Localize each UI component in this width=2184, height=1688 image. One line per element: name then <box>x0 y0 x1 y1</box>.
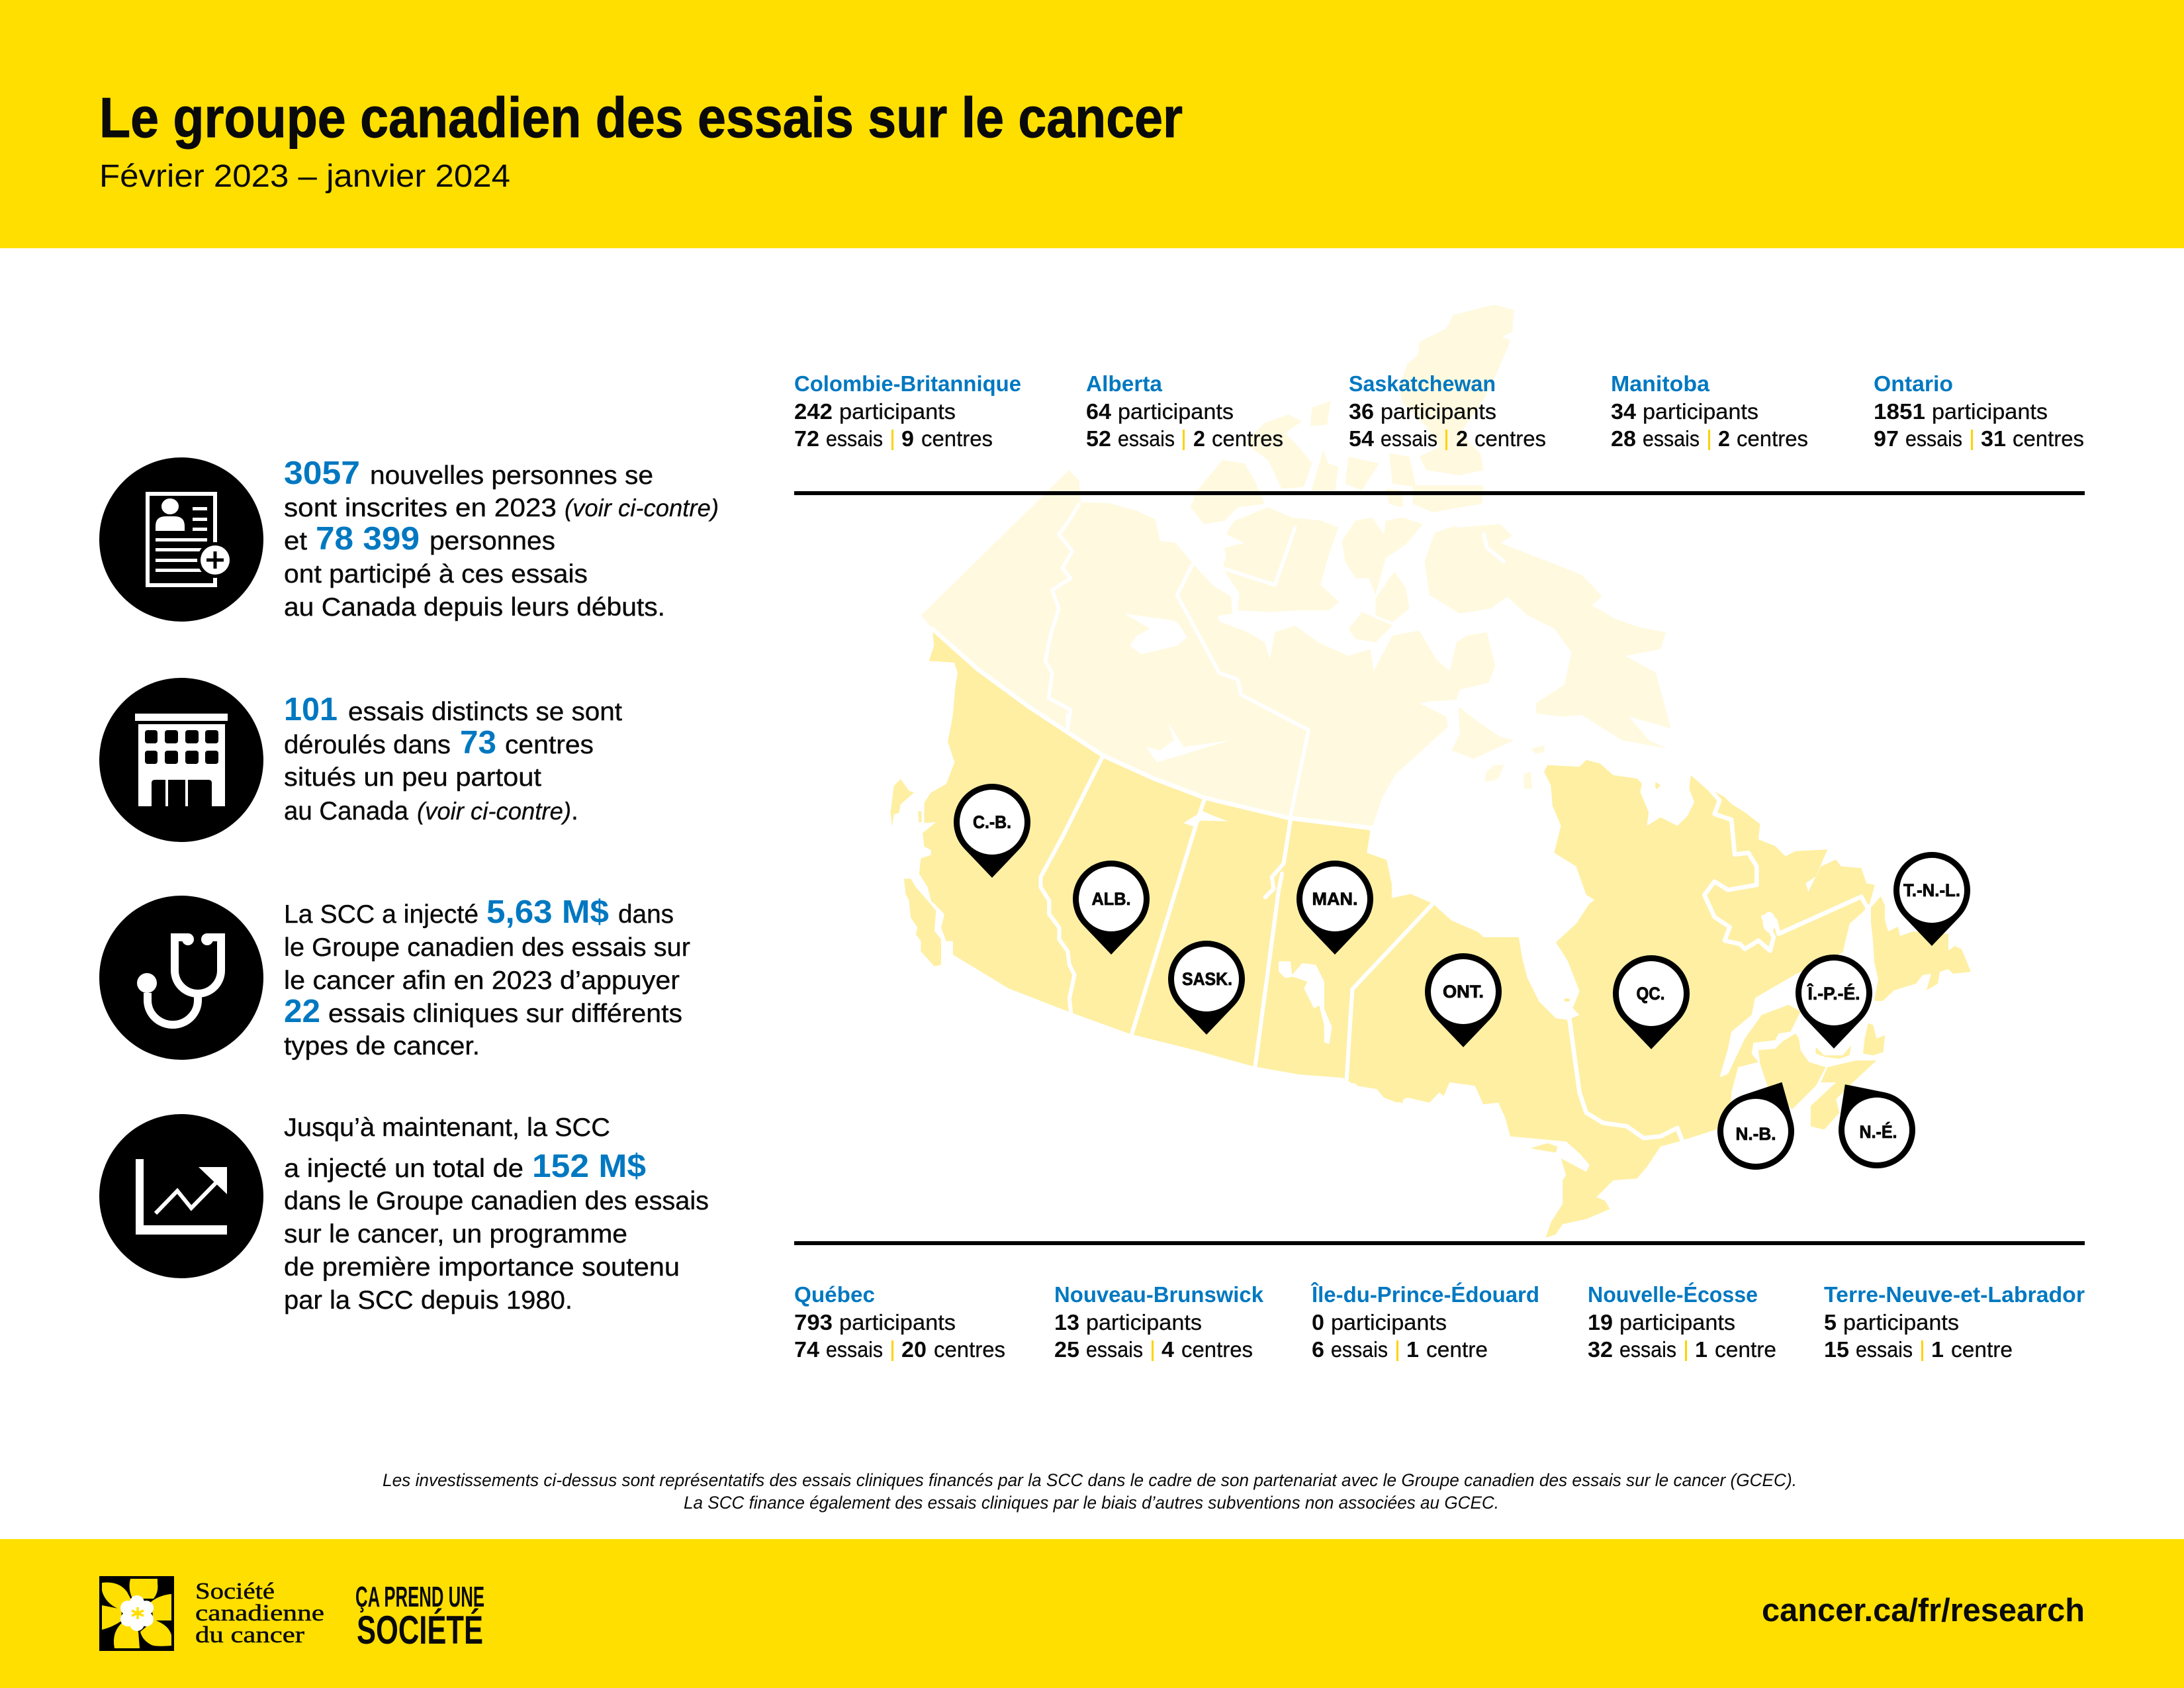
icon: building <box>99 678 263 842</box>
text block: 5.63 million <box>284 894 690 1060</box>
footer band <box>0 1539 2184 1688</box>
western provinces <box>891 624 1403 1103</box>
Nova Scotia <box>1811 1060 1876 1129</box>
region stats: Nouveau-Brunswick: essais <box>1086 1337 1143 1362</box>
region stats: Colombie-Britannique: 9 <box>901 426 914 451</box>
region stats: Ontario: essais <box>1905 426 1962 451</box>
region stats: Nouvelle-Écosse: centre <box>1715 1337 1776 1362</box>
region stats: Île-du-Prince-Édouard: 1 <box>1406 1337 1419 1362</box>
text block: 152 million: de première importance soutenu <box>284 1253 680 1282</box>
region stats: Ontario: Ontario <box>1874 371 1953 396</box>
region stats: Terre-Neuve-et-Labrador: essais <box>1856 1337 1913 1362</box>
text block: 152 million <box>284 1113 709 1315</box>
region stats: Ontario: participants <box>1932 399 2048 424</box>
pin: T.-N.-L. <box>1893 852 1970 946</box>
region stats: Nouvelle-Écosse: 19 <box>1588 1310 1613 1335</box>
text block: participants: 78 399 <box>316 521 420 557</box>
text block: participants: (voir ci-contre) <box>565 494 719 522</box>
pin: N.-B.: N.-B. <box>1735 1124 1776 1144</box>
region stats: Île-du-Prince-Édouard: 0 <box>1312 1310 1324 1335</box>
pin: ONT.: ONT. <box>1443 982 1484 1002</box>
text block: 152 million: Jusqu’à maintenant, la SCC <box>284 1113 610 1142</box>
region stats: Québec: 793 <box>794 1310 833 1335</box>
pin: Î.-P.-É.: Î.-P.-É. <box>1807 983 1860 1004</box>
logo text: du cancer <box>195 1622 304 1648</box>
text block: trials and centres: au Canada <box>284 797 408 825</box>
region stats: Alberta: Alberta <box>1086 371 1163 396</box>
region stats: Saskatchewan: participants <box>1381 399 1496 424</box>
region stats: Alberta: centres <box>1212 426 1283 451</box>
text block: 5.63 million: essais cliniques sur différents <box>328 1000 682 1028</box>
pin: ALB. <box>1073 861 1150 955</box>
header band <box>0 0 2184 248</box>
region stats: Manitoba: centres <box>1737 426 1808 451</box>
region stats: Nouveau-Brunswick: 4 <box>1161 1337 1175 1362</box>
region stats: Saskatchewan: essais <box>1381 426 1437 451</box>
region stats: Île-du-Prince-Édouard: centre <box>1426 1337 1488 1362</box>
region stats: Nouveau-Brunswick <box>1054 1282 1264 1362</box>
logo: daffodil <box>99 1576 174 1651</box>
northern territories, pale <box>921 401 1495 828</box>
region stats: Colombie-Britannique: participants <box>839 399 956 424</box>
Cape Breton <box>1863 1023 1885 1055</box>
region stats: Saskatchewan <box>1349 371 1546 451</box>
text block: 152 million: dans le Groupe canadien des essais <box>284 1187 709 1215</box>
text block: 5.63 million: 22 <box>284 994 320 1029</box>
Newfoundland <box>1871 896 1971 1001</box>
pin: QC.: QC. <box>1636 984 1665 1004</box>
pin: N.-B. <box>1704 1064 1816 1183</box>
Prince Edward Island <box>1816 1045 1851 1058</box>
tagline: SOCIÉTÉ <box>357 1608 483 1652</box>
region stats: Terre-Neuve-et-Labrador: centre <box>1951 1337 2013 1362</box>
text block: 152 million: par la SCC depuis 1980. <box>284 1286 572 1315</box>
region stats: Nouveau-Brunswick: 13 <box>1054 1310 1079 1335</box>
region stats: Saskatchewan: 36 <box>1349 399 1374 424</box>
pin: MAN.: MAN. <box>1312 889 1358 909</box>
title: Le groupe canadien des essais sur le cancer <box>99 87 1183 150</box>
region stats: Terre-Neuve-et-Labrador: 5 <box>1824 1310 1837 1335</box>
eastern provinces <box>1289 760 1885 1238</box>
New Brunswick <box>1758 1033 1826 1109</box>
text block: participants: nouvelles personnes se <box>370 461 653 490</box>
region stats: Québec: 74 <box>794 1337 820 1362</box>
text block: 5.63 million: types de cancer. <box>284 1032 480 1060</box>
region stats: Nouvelle-Écosse <box>1588 1282 1776 1362</box>
text block: 5.63 million: le Groupe canadien des essais sur <box>284 933 690 962</box>
region stats: Nouveau-Brunswick: centres <box>1181 1337 1253 1362</box>
small islands <box>1564 998 1570 1002</box>
pin: SASK.: SASK. <box>1182 969 1232 989</box>
region stats: Terre-Neuve-et-Labrador: participants <box>1843 1310 1959 1335</box>
region stats: Québec: centres <box>934 1337 1005 1362</box>
region stats: Terre-Neuve-et-Labrador: Terre-Neuve-et-Labrador <box>1824 1282 2085 1307</box>
region stats: Alberta <box>1086 371 1283 451</box>
region stats: Ontario <box>1874 371 2084 451</box>
text block: 5.63 million: 5,63 M$ <box>486 894 609 930</box>
region stats: Nouvelle-Écosse: participants <box>1619 1310 1735 1335</box>
region stats: Ontario: 31 <box>1981 426 2006 451</box>
text block: trials and centres: . <box>571 797 578 825</box>
region stats: Manitoba <box>1611 371 1808 451</box>
pin: N.-É. <box>1813 1062 1931 1184</box>
text block: 152 million: sur le cancer, un programme <box>284 1220 627 1248</box>
Haida Gwaii <box>891 779 914 826</box>
region stats: Alberta: essais <box>1118 426 1175 451</box>
region stats: Saskatchewan: centres <box>1475 426 1546 451</box>
icon: stethoscope <box>99 896 263 1060</box>
region stats: Québec <box>794 1282 1005 1362</box>
region stats: Alberta: 64 <box>1086 399 1112 424</box>
website: cancer.ca/fr/research <box>1762 1593 2085 1628</box>
text block: participants <box>284 455 719 622</box>
region stats: Nouvelle-Écosse: 32 <box>1588 1337 1613 1362</box>
region stats: Terre-Neuve-et-Labrador <box>1824 1282 2085 1362</box>
region stats: Saskatchewan: 54 <box>1349 426 1375 451</box>
lakes and territorial borders <box>1124 614 1187 654</box>
region stats: Manitoba: Manitoba <box>1611 371 1710 396</box>
text block: participants: au Canada depuis leurs débuts. <box>284 593 665 622</box>
region stats: Alberta: participants <box>1118 399 1234 424</box>
region stats: Alberta: 2 <box>1193 426 1205 451</box>
rule below provinces <box>794 1241 2085 1245</box>
text block: trials and centres: centres <box>505 731 594 759</box>
region stats: Manitoba: 2 <box>1718 426 1730 451</box>
region stats: Saskatchewan: Saskatchewan <box>1349 371 1496 396</box>
Vancouver Island <box>904 878 941 966</box>
text block: participants: personnes <box>430 527 555 555</box>
pin: ONT. <box>1425 953 1502 1047</box>
arctic islands, pale <box>1312 305 1671 788</box>
region stats: Nouvelle-Écosse: essais <box>1619 1337 1676 1362</box>
region stats: Île-du-Prince-Édouard: 6 <box>1312 1337 1324 1362</box>
region stats: Nouveau-Brunswick: 25 <box>1054 1337 1079 1362</box>
text block: participants: et <box>284 527 307 555</box>
region stats: Colombie-Britannique <box>794 371 1021 451</box>
region stats: Colombie-Britannique: 72 <box>794 426 819 451</box>
region stats: Québec: essais <box>826 1337 883 1362</box>
text block: trials and centres: 101 <box>284 692 338 727</box>
pin: C.-B.: C.-B. <box>973 812 1011 832</box>
region stats: Île-du-Prince-Édouard: participants <box>1331 1310 1447 1335</box>
region stats: Ontario: centres <box>2013 426 2084 451</box>
text block: 152 million: a injecté un total de <box>284 1154 523 1183</box>
region stats: Québec: participants <box>839 1310 956 1335</box>
text block: trials and centres: essais distincts se sont <box>348 698 622 726</box>
region stats: Manitoba: 28 <box>1611 426 1636 451</box>
region stats: Île-du-Prince-Édouard <box>1310 1282 1539 1362</box>
region stats: Colombie-Britannique: 242 <box>794 399 833 424</box>
region stats: Nouveau-Brunswick: participants <box>1086 1310 1202 1335</box>
icon: patient record <box>99 457 263 622</box>
region stats: Colombie-Britannique: essais <box>826 426 883 451</box>
footnote <box>383 1470 1797 1513</box>
pin: Î.-P.-É. <box>1796 955 1872 1049</box>
region stats: Québec: Québec <box>794 1282 875 1307</box>
text block: 152 million: 152 M$ <box>532 1149 646 1184</box>
text block: participants: sont inscrites en 2023 <box>284 494 557 522</box>
text block: trials and centres: (voir ci-contre) <box>417 798 571 825</box>
Manitoba–Ontario border and 60th parallel end <box>1346 902 1434 1085</box>
region stats: Nouvelle-Écosse: 1 <box>1695 1337 1707 1362</box>
tagline: ÇA PREND UNE <box>355 1581 484 1613</box>
pin: T.-N.-L.: T.-N.-L. <box>1903 880 1960 900</box>
region stats: Terre-Neuve-et-Labrador: 1 <box>1931 1337 1944 1362</box>
lakes and provincial borders <box>1279 961 1332 1044</box>
text block: trials and centres: 73 <box>460 725 496 761</box>
region stats: Ontario: 97 <box>1874 426 1899 451</box>
region stats: Ontario: 1851 <box>1874 399 1925 424</box>
footnote: Les investissements ci-dessus sont représentatifs des essais cliniques financés par la SCC dans le cadre de son partenariat avec le Groupe canadien des essais sur le cancer (GCEC). <box>383 1470 1797 1490</box>
region stats: Île-du-Prince-Édouard: essais <box>1331 1337 1388 1362</box>
text block: 5.63 million: dans <box>618 900 674 929</box>
rule above provinces <box>794 491 2085 495</box>
region stats: Colombie-Britannique: Colombie-Britannique <box>794 371 1021 396</box>
text block: 5.63 million: La SCC a injecté <box>284 900 478 929</box>
subtitle: Février 2023 – janvier 2024 <box>99 159 510 194</box>
pin: MAN. <box>1297 861 1373 955</box>
region stats: Nouveau-Brunswick: Nouveau-Brunswick <box>1054 1282 1264 1307</box>
region stats: Alberta: 52 <box>1086 426 1111 451</box>
region stats: Colombie-Britannique: centres <box>921 426 993 451</box>
pin: QC. <box>1613 955 1690 1049</box>
pin: C.-B. <box>954 784 1030 878</box>
Quebec borders <box>1694 775 1870 951</box>
pin: SASK. <box>1168 941 1245 1035</box>
footnote: La SCC finance également des essais cliniques par le biais d’autres subventions non associées au GCEC. <box>684 1493 1499 1513</box>
pin: N.-É.: N.-É. <box>1860 1121 1897 1142</box>
text block: trials and centres: situés un peu partout <box>284 763 541 792</box>
text block: participants: 3057 <box>284 455 360 491</box>
region stats: Saskatchewan: 2 <box>1456 426 1468 451</box>
region stats: Île-du-Prince-Édouard: Île-du-Prince-Édouard <box>1310 1282 1539 1307</box>
map of Canada <box>891 305 1971 1238</box>
region stats: Terre-Neuve-et-Labrador: 15 <box>1824 1337 1849 1362</box>
region stats: Manitoba: 34 <box>1611 399 1637 424</box>
tagline <box>355 1581 484 1652</box>
text block: trials and centres <box>284 692 622 825</box>
icon: rising chart <box>99 1114 263 1278</box>
text block: participants: ont participé à ces essais <box>284 560 588 588</box>
region stats: Québec: 20 <box>901 1337 927 1362</box>
logo text: canadienne <box>195 1600 324 1626</box>
region stats: Manitoba: essais <box>1643 426 1700 451</box>
pin: ALB.: ALB. <box>1092 889 1130 909</box>
region stats: Manitoba: participants <box>1643 399 1758 424</box>
text block: trials and centres: déroulés dans <box>284 731 451 759</box>
text block: 5.63 million: le cancer afin en 2023 d’appuyer <box>284 966 680 995</box>
logo text: Société <box>195 1578 275 1604</box>
logo text <box>195 1578 324 1648</box>
region stats: Nouvelle-Écosse: Nouvelle-Écosse <box>1588 1282 1758 1307</box>
